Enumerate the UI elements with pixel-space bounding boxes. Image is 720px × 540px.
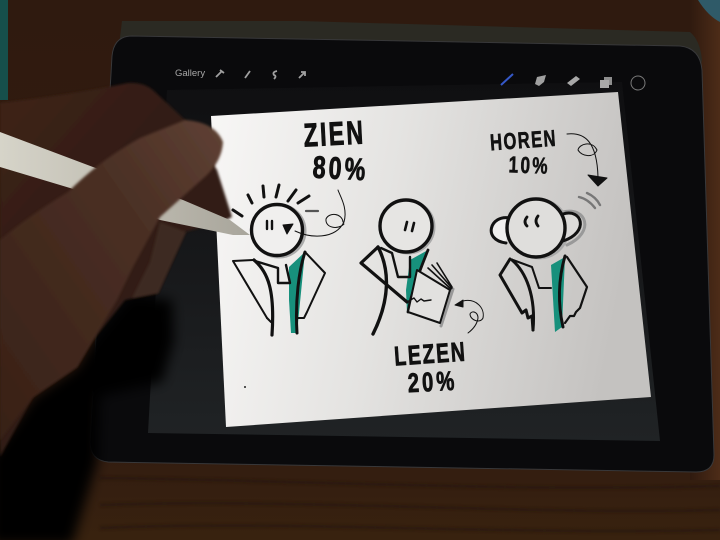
- heading: ZIEN 80%: 80%: [312, 149, 369, 187]
- illustration: person reading: [361, 200, 483, 334]
- body and arm: [361, 247, 428, 334]
- palm and fingers: [0, 83, 232, 457]
- heading: HOREN 10%: 10%: [508, 153, 550, 179]
- curved pointer swirl: [295, 190, 345, 236]
- heading: LEZEN 20%: 20%: [407, 366, 458, 399]
- smudge icon: [535, 75, 546, 86]
- thumb: [0, 120, 223, 440]
- dot on paper: [244, 386, 246, 388]
- arrow pointing to ear: [567, 134, 607, 186]
- head with ears: [491, 199, 585, 258]
- lower finger: [132, 222, 186, 298]
- heading: ZIEN 80%: ZIEN: [303, 114, 366, 155]
- layers icon: [600, 77, 612, 88]
- head with rays: [233, 185, 318, 257]
- head: [380, 200, 434, 253]
- open book: [407, 263, 453, 326]
- stylus: [0, 132, 250, 235]
- heading: LEZEN 20%: LEZEN: [393, 336, 467, 371]
- body: [500, 256, 587, 332]
- Procreate canvas grid area: [148, 82, 660, 441]
- tool icons: [216, 70, 305, 79]
- hand shadow: [0, 295, 174, 540]
- blue object at top right: [698, 0, 720, 22]
- body: [233, 252, 325, 335]
- heading: ZIEN 80%: [303, 114, 369, 187]
- sound waves: [579, 193, 600, 208]
- arrow pointing to book: [455, 300, 483, 333]
- hand holding stylus: [0, 83, 250, 457]
- paper canvas: [211, 92, 651, 427]
- gallery label: Gallery: [175, 68, 205, 79]
- illustration: person seeing: [233, 185, 345, 335]
- brush icon: [501, 74, 513, 85]
- illustration: person hearing: [491, 134, 607, 332]
- app toolbar: [175, 68, 645, 90]
- heading: LEZEN 20%: [393, 336, 467, 399]
- colour picker: [631, 76, 645, 90]
- heading: HOREN 10%: [489, 126, 558, 179]
- tablet body: [90, 36, 714, 472]
- teal object at top left: [0, 0, 8, 100]
- heading: HOREN 10%: HOREN: [489, 126, 558, 156]
- eraser icon: [567, 76, 580, 86]
- tablet cover: [116, 21, 702, 70]
